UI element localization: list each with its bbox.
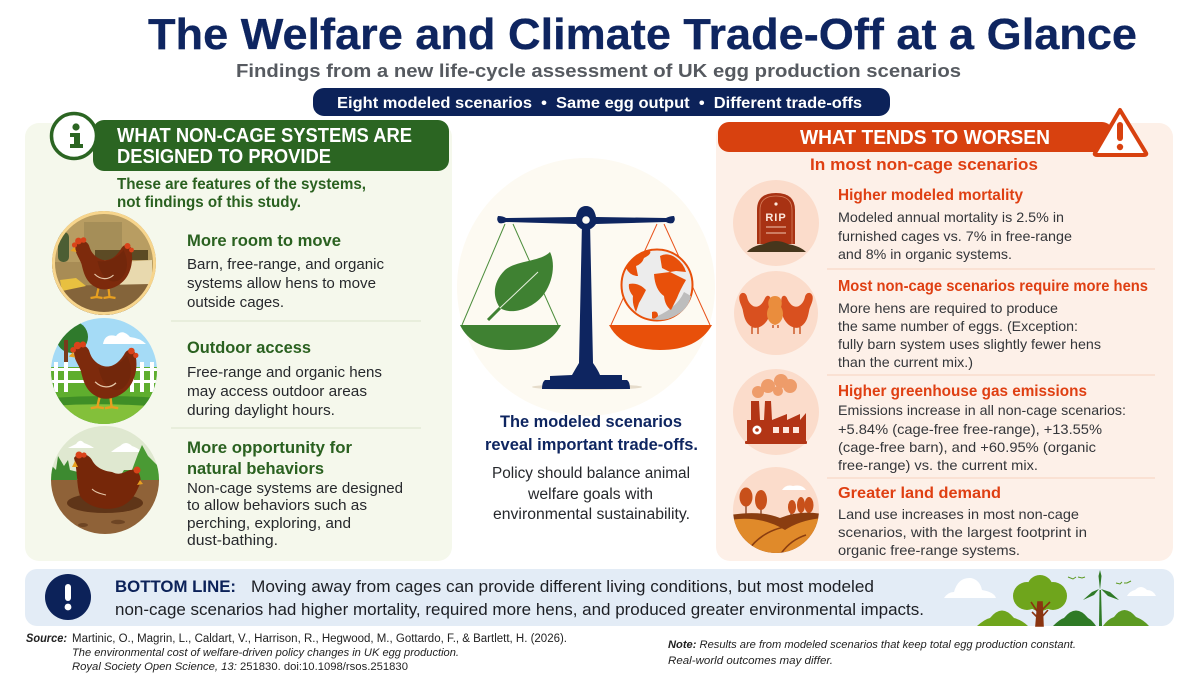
panel: what tends to worsen <box>716 110 1173 561</box>
panel header <box>718 122 1113 152</box>
text: greenhouse gas emissions: Emissions increase in all non-cage scenarios: <box>838 402 1126 418</box>
icon: globe <box>622 250 692 320</box>
text: trade-off message: welfare goals with <box>527 486 653 503</box>
panel header: WHAT NON-CAGE SYSTEMS ARE <box>117 125 412 147</box>
text: higher mortality: and 8% in organic systems. <box>838 246 1012 262</box>
panel subheading: In most non-cage scenarios <box>810 155 1038 174</box>
icon: gravestone: RIP <box>765 212 787 224</box>
icon: hens group <box>734 271 818 355</box>
icon: farmland <box>733 467 819 553</box>
text: land demand: Land use increases in most non-cage <box>838 506 1079 522</box>
panel: what non-cage systems provide <box>25 114 452 561</box>
text: natural behaviors: More opportunity for <box>187 438 352 457</box>
icon: hen dust-bathing <box>50 425 162 536</box>
text: greenhouse gas emissions <box>838 383 1126 473</box>
text: natural behaviors: Non-cage systems are designed <box>187 480 403 497</box>
icon: exclamation <box>45 574 91 620</box>
text: trade-off message: reveal important trade-offs. <box>485 435 698 454</box>
panel: bottom line <box>25 569 1174 626</box>
text: more room to move: Barn, free-range, and organic <box>187 256 385 273</box>
note: Note: Results are from modeled scenarios that keep total egg production constant. <box>668 639 1076 651</box>
icon: hen in barn <box>50 210 160 316</box>
text: land demand: scenarios, with the largest footprint in <box>838 524 1087 540</box>
text: greenhouse gas emissions: (cage-free barn), and +60.95% (organic <box>838 439 1096 455</box>
text: more hens: More hens are required to produce <box>838 300 1058 316</box>
source citation <box>26 633 567 673</box>
banner: scenario summary: Eight modeled scenarios • Same egg output • Different trade-offs <box>337 95 862 112</box>
illustration: trees and wind turbine <box>944 570 1156 626</box>
text: more room to move <box>187 231 385 311</box>
panel note: These are features of the systems, <box>117 176 366 193</box>
text: trade-off message <box>485 412 698 523</box>
text: more room to move: systems allow hens to move <box>187 275 376 292</box>
text: greenhouse gas emissions: +5.84% (cage-free free-range), +13.55% <box>838 421 1102 437</box>
icon: leaf <box>488 252 553 320</box>
text: higher mortality <box>838 187 1072 262</box>
source citation: Martinic, O., Magrin, L., Caldart, V., Harrison, R., Hegwood, M., Gottardo, F., & Bartlett, H. (2026). <box>72 633 567 645</box>
text: land demand <box>838 485 1087 558</box>
source citation: Source: <box>26 633 67 645</box>
text: outdoor access: may access outdoor areas <box>187 383 367 400</box>
text: outdoor access <box>187 338 382 419</box>
icon: warning triangle <box>1095 110 1146 155</box>
text: natural behaviors <box>187 438 403 549</box>
text: outdoor access: during daylight hours. <box>187 402 335 419</box>
subtitle: Findings from a new life-cycle assessment of UK egg production scenarios <box>236 60 961 81</box>
text: land demand: Greater land demand <box>838 485 1001 502</box>
note <box>668 639 1076 667</box>
text: more room to move: outside cages. <box>187 294 284 311</box>
text: trade-off message: Policy should balance animal <box>492 465 690 482</box>
banner: scenario summary <box>313 88 890 116</box>
panel note <box>117 176 366 211</box>
icon: factory <box>733 369 819 455</box>
icon: hen outdoors <box>50 316 160 426</box>
text: outdoor access: Outdoor access <box>187 338 311 357</box>
text: higher mortality: Modeled annual mortality is 2.5% in <box>838 209 1064 225</box>
text: more room to move: More room to move <box>187 231 341 250</box>
scale post and base <box>542 222 630 389</box>
text: more hens: fully barn system uses slightly fewer hens <box>838 336 1101 352</box>
text: outdoor access: Free-range and organic hens <box>187 364 382 381</box>
icon: gravestone <box>733 180 819 266</box>
text: natural behaviors: dust-bathing. <box>187 532 278 549</box>
text: bottom line <box>115 578 924 619</box>
text: more hens: than the current mix.) <box>838 354 973 370</box>
icon: info <box>52 114 96 158</box>
text: greenhouse gas emissions: Higher greenhouse gas emissions <box>838 383 1087 400</box>
text: more hens: Most non-cage scenarios require more hens <box>838 278 1148 295</box>
text: trade-off message: environmental sustainability. <box>493 506 690 523</box>
panel header <box>93 120 449 171</box>
text: bottom line: non-cage scenarios had higher mortality, required more hens, and produced greater environmental impacts. <box>115 601 924 619</box>
text: land demand: organic free-range systems. <box>838 542 1020 558</box>
text: bottom line: BOTTOM LINE: <box>115 578 236 596</box>
source citation: The environmental cost of welfare-driven policy changes in UK egg production. <box>72 647 459 659</box>
text: more hens <box>838 278 1148 370</box>
note: Real-world outcomes may differ. <box>668 655 833 667</box>
text: natural behaviors: perching, exploring, and <box>187 515 351 532</box>
text: natural behaviors: natural behaviors <box>187 459 324 478</box>
title: The Welfare and Climate Trade-Off at a Glance <box>148 10 1137 59</box>
panel note: not findings of this study. <box>117 194 301 211</box>
source citation: Royal Society Open Science, 13: 251830. doi:10.1098/rsos.251830 <box>72 661 408 673</box>
icon: balance scale <box>457 158 715 416</box>
text: more hens: the same number of eggs. (Exception: <box>838 318 1078 334</box>
text: greenhouse gas emissions: free-range) vs. the current mix. <box>838 457 1038 473</box>
text: higher mortality: Higher modeled mortality <box>838 187 1023 204</box>
panel header: DESIGNED TO PROVIDE <box>117 146 331 168</box>
text: trade-off message: The modeled scenarios <box>500 412 682 431</box>
text: bottom line: Moving away from cages can provide different living conditions, but most modeled <box>251 578 874 596</box>
text: natural behaviors: to allow behaviors such as <box>187 497 367 514</box>
panel header: WHAT TENDS TO WORSEN <box>800 127 1050 149</box>
text: higher mortality: furnished cages vs. 7% in free-range <box>838 228 1072 244</box>
